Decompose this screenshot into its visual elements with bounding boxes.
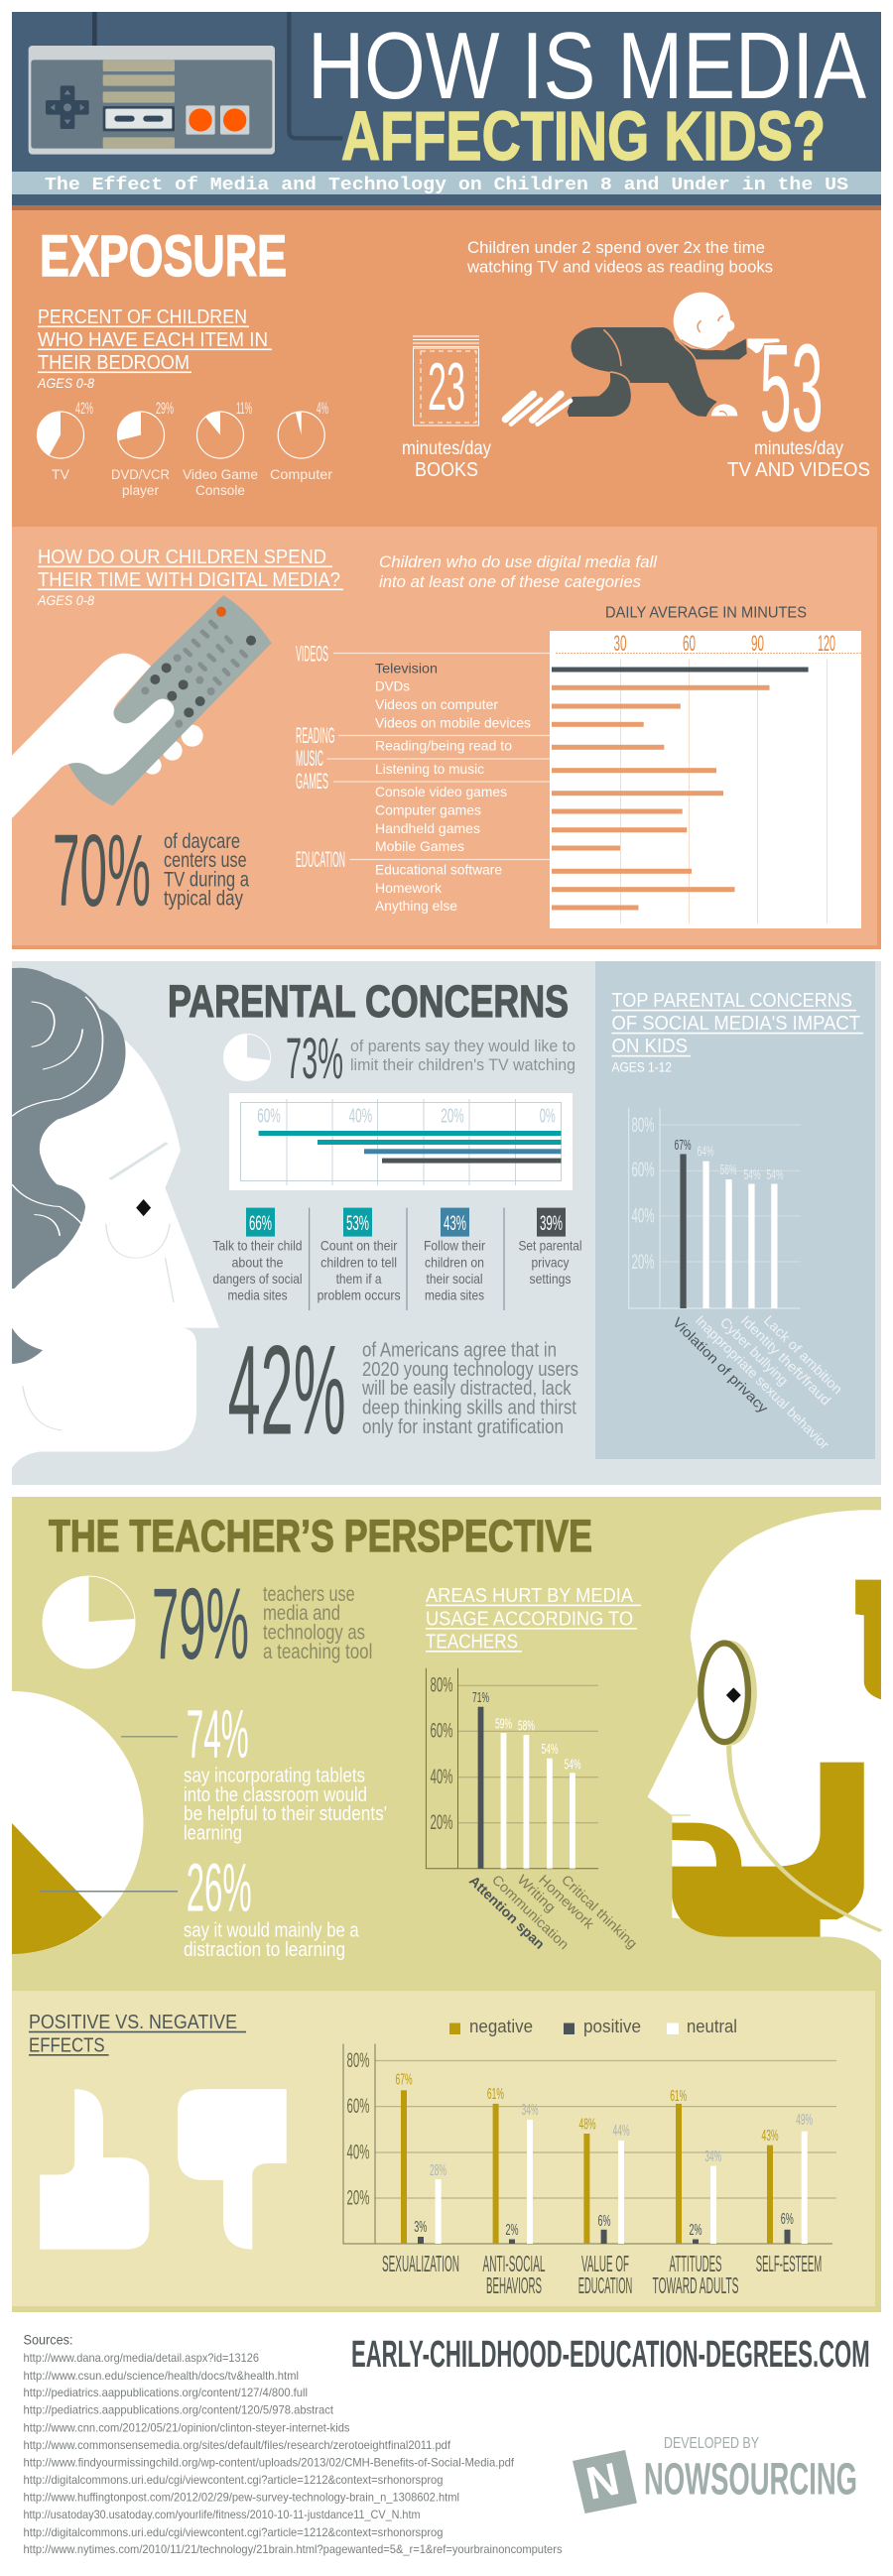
stat: 70 percent daycare: 70% [53,813,151,927]
icon: hand holding remote [12,595,272,818]
chart: top concerns bars [629,1108,845,1452]
chart: top concerns bars: 56% [720,1162,736,1178]
chart: effects bars: 60% [347,2095,369,2118]
heading: percent of children: AGES 0-8 [37,375,94,391]
heading: digital media time: THEIR TIME WITH DIGITAL MEDIA? [38,569,340,591]
legend: positive [583,2017,641,2036]
chart: top concerns bars: Violation of privacy [670,1314,771,1415]
stat: 53 percent count on [318,1208,401,1303]
stat: 79 percent: teachers use [263,1583,355,1606]
stat: 66 percent talk: dangers of social [212,1271,302,1287]
heading: digital media time [37,547,343,608]
chart: effects bars: 20% [347,2187,369,2210]
chart: effects bars: 3% [414,2219,427,2236]
heading: top parental concerns: OF SOCIAL MEDIA'S IMPACT [611,1013,860,1035]
pie: DVD/VCR player: DVD/VCR [111,466,170,482]
stat: 79 percent [43,1567,372,1680]
heading: digital media time: AGES 0-8 [37,592,94,608]
heading: positive vs negative: POSITIVE VS. NEGATIVE [29,2012,237,2033]
pie: video game console [183,399,258,498]
stat: 39 percent privacy: settings [530,1271,572,1287]
text block: sources: http://www.nytimes.com/2010/11/21/technology/21brain.html?pagewanted=5&_r=1&ref=yourbrainoncomputers [24,2542,562,2556]
panel: parental concerns [12,961,881,1485]
text: developed by: DEVELOPED BY [664,2435,759,2452]
text block: sources: http://www.commonsensemedia.org/sites/default/files/research/zerotoeightfinal2011.pdf [24,2438,451,2452]
heading: positive vs negative [29,2012,246,2057]
chart: parent actions bars: 60% [257,1105,281,1127]
legend: neutral [687,2017,737,2036]
chart: effects bars: 48% [579,2116,595,2133]
chart: areas hurt bars: 58% [518,1717,535,1734]
chart: activity labels: Reading/being read to [375,738,512,754]
text: categories note: Children who do use digital media fall [379,552,658,571]
text: books minutes: BOOKS [415,459,478,481]
logo: nowsourcing: N [581,2452,623,2510]
stat: 66 percent talk: 66% [249,1212,272,1235]
chart: effects bars: 6% [597,2213,611,2230]
chart: effects bars: ANTI-SOCIAL [482,2251,546,2276]
subtitle band [12,172,881,195]
text: categories note: into at least one of these categories [379,572,641,591]
chart: top concerns bars: 64% [697,1144,714,1161]
text: tv minutes [727,438,870,481]
chart: effects bars: ATTITUDES [669,2251,722,2276]
chart: effects bars: VALUE OF [581,2251,629,2276]
text block: sources: http://pediatrics.aappublications.org/content/127/4/800.full [24,2386,308,2399]
stat: 74 percent: learning [184,1823,242,1845]
text block: sources: http://www.cnn.com/2012/05/21/opinion/clinton-steyer-internet-kids [24,2420,349,2434]
chart: areas hurt bars: 40% [431,1766,452,1788]
chart: activity labels: Homework [375,880,443,896]
icon: book with 23: 23 [428,349,465,425]
text block: sources: http://pediatrics.aappublications.org/content/120/5/978.abstract [24,2403,334,2417]
text block: sources: http://www.dana.org/media/detail.aspx?id=13126 [24,2351,259,2365]
text block: sources: http://www.findyourmissingchild.org/wp-content/uploads/2013/02/CMH-Benefits-of-Social-Media.pdf [24,2456,515,2470]
chart: effects bars: 34% [522,2102,538,2119]
text: categories note [379,552,658,591]
chart: category labels: GAMES [296,769,328,794]
stat: 43 percent follow: media sites [425,1288,484,1303]
chart: top concerns bars: 80% [631,1114,655,1137]
chart: effects bars: 6% [781,2211,794,2228]
legend: negative [469,2017,533,2036]
text block: sources: http://digitalcommons.uri.edu/cgi/viewcontent.cgi?article=1212&context=srhonorsprog [24,2473,443,2487]
pie: video game console: Console [195,482,245,498]
stat: 43 percent follow: Follow their [424,1238,485,1254]
text block: sources: Sources: [24,2332,73,2348]
text: books minutes [402,438,491,481]
chart: bedroom item pies [38,399,332,498]
chart: top concerns bars: Identity theft/fraud [738,1312,834,1409]
stat: 42 percent: deep thinking skills and thirst [362,1398,576,1419]
chart: activity labels: Mobile Games [375,838,464,854]
chart: top concerns bars: 40% [631,1205,655,1228]
chart: top concerns bars: Cyber bullying [717,1314,792,1389]
stat: 73 percent: limit their children's TV watching [350,1055,575,1074]
chart: areas hurt bars: Attention span [466,1873,548,1952]
heading: top parental concerns [611,990,863,1075]
text block: sources: http://digitalcommons.uri.edu/cgi/viewcontent.cgi?article=1212&context=srhonorsprog [24,2525,443,2539]
chart: effects bars: 61% [487,2086,504,2103]
icon: book with 23 [413,336,479,426]
chart: parent actions bars: 40% [349,1105,372,1127]
chart: areas hurt bars: 80% [431,1674,452,1697]
stat: 39 percent privacy: privacy [532,1254,570,1270]
pie: computer: Computer [270,466,332,482]
chart: areas hurt bars: 20% [431,1811,452,1834]
chart: activity labels: Handheld games [375,820,480,836]
chart: areas hurt bars: Critical thinking [559,1872,641,1951]
icon: tablet pie semicircle [12,1691,178,1954]
heading: exposure: EXPOSURE [40,224,287,289]
chart: activity labels: Computer games [375,802,481,818]
chart: top concerns bars: 60% [631,1159,655,1181]
panel: digital media [12,526,881,949]
stat: 74 percent: be helpful to their students' [184,1803,387,1825]
text: under 2 comparison [466,238,773,276]
chart: activity labels: Videos on computer [375,696,498,712]
chart: areas hurt bars: 54% [564,1756,581,1773]
panel: positive vs negative effects [12,1991,875,2306]
panel: exposure [12,210,881,526]
legend [449,2017,737,2036]
pie: TV: 42% [75,399,93,418]
chart: areas hurt bars: Homework [536,1872,598,1932]
heading: parental concerns: PARENTAL CONCERNS [168,976,569,1027]
chart: parent actions bars: 20% [441,1105,464,1127]
heading: percent of children [37,307,272,391]
chart: category labels: MUSIC [296,746,323,771]
chart: activity labels: Educational software [375,862,502,878]
chart: daily minutes bars: 30 [613,631,627,656]
chart: activity labels [375,660,531,914]
stat: 26 percent: say it would mainly be a [184,1920,359,1942]
chart: effects bars: 49% [796,2112,813,2129]
chart: areas hurt bars: 54% [542,1741,558,1758]
chart: effects bars: TOWARD ADULTS [653,2272,738,2298]
chart: effects bars: 2% [689,2222,702,2239]
heading: percent of children: PERCENT OF CHILDREN [38,307,247,328]
text block: sources: http://www.csun.edu/science/health/docs/tv&health.html [24,2369,299,2383]
stat: 74 percent [184,1696,387,1845]
stat: 42 percent: will be easily distracted, lack [361,1378,572,1400]
pie: TV: TV [52,466,70,482]
stat: 43 percent follow: their social [427,1271,482,1287]
text: under 2 comparison: watching TV and videos as reading books [466,258,773,276]
stat: 66 percent talk: media sites [228,1288,288,1303]
text block: sources: http://usatoday30.usatoday.com/yourlife/fitness/2010-10-11-justdance11_CV_N.htm [24,2508,421,2521]
pie: computer: 4% [317,399,328,418]
chart: daily minutes bars: 120 [818,631,835,656]
logo: nowsourcing [573,2450,857,2514]
chart: activity labels: Listening to music [375,761,484,777]
chart: activity labels: Television [375,660,438,675]
chart: activity labels: Console video games [375,784,507,799]
stat: 70 percent daycare: typical day [164,888,243,911]
panel: header [12,12,881,210]
text block: sources [24,2332,562,2556]
text: books minutes: minutes/day [402,438,491,459]
stat: 42 percent: 2020 young technology users [362,1359,578,1381]
chart: effects bars: 28% [430,2162,446,2179]
text block: sources: http://www.huffingtonpost.com/2012/02/29/pew-survey-technology-brain_n_1308602.html [24,2490,459,2504]
heading: top parental concerns: AGES 1-12 [611,1059,672,1075]
stat: 42 percent: of Americans agree that in [362,1339,557,1361]
stat: 39 percent privacy: Set parental [518,1238,581,1254]
stat: 26 percent: 26% [187,1850,252,1926]
stat: 42 percent: only for instant gratification [362,1416,564,1438]
heading: percent of children: WHO HAVE EACH ITEM IN [38,329,268,351]
chart: effects bars: 43% [762,2128,778,2145]
heading: areas hurt [426,1585,641,1653]
chart: areas hurt bars: 71% [472,1689,489,1706]
stat: 42 percent: 42% [228,1319,346,1462]
chart: category labels: READING [296,723,335,748]
chart: effects bars: EDUCATION [578,2272,632,2298]
stat: 53 percent count on: children to tell [320,1254,397,1270]
stat: 79 percent: a teaching tool [263,1641,372,1663]
stat: 73 percent [223,1027,575,1091]
chart: parent actions bars: 0% [540,1105,556,1127]
pie: DVD/VCR player: player [122,482,159,498]
icon: thumbs up and down [40,2089,287,2250]
pie: TV [38,399,93,482]
chart: top concerns bars: Inappropriate sexual behavior [693,1312,833,1452]
heading: digital media time: HOW DO OUR CHILDREN SPEND [38,547,326,568]
icon: parent face profile [12,968,219,1468]
chart: activity labels: Videos on mobile devices [375,715,531,731]
chart: category labels: EDUCATION [296,847,345,872]
stat: 26 percent: distraction to learning [184,1939,345,1961]
stat: 66 percent talk: about the [232,1254,284,1270]
pie: video game console: 11% [236,399,252,418]
chart: effects bars: SEXUALIZATION [382,2251,459,2276]
stat: 70 percent daycare: of daycare [164,830,240,853]
chart: effects bars: 80% [347,2049,369,2072]
stat: 74 percent: into the classroom would [184,1784,367,1806]
chart: areas hurt bars: 59% [495,1715,512,1732]
icon: crawling baby [505,293,824,457]
chart: areas hurt bars [426,1668,641,1952]
chart: top concerns bars: 20% [631,1251,655,1274]
stat: 79 percent: 79% [152,1567,249,1680]
chart: daily minutes bars: 90 [751,631,764,656]
chart: areas hurt bars: Communication [489,1872,573,1952]
stat: 53 percent count on: 53% [346,1212,369,1235]
chart: daily minutes bars [550,631,864,928]
chart: effects bars [343,2043,836,2298]
pie: computer [270,399,332,482]
subtitle band: The Effect of Media and Technology on Children 8 and Under in the US [45,176,848,195]
stats: parent actions [212,1208,581,1310]
icon: game controller [29,12,342,155]
chart: effects bars: 67% [395,2071,413,2089]
stat: 26 percent [184,1850,359,1961]
heading: top parental concerns: TOP PARENTAL CONCERNS [611,990,852,1012]
pie: DVD/VCR player: 29% [156,399,174,418]
chart: effects bars: BEHAVIORS [486,2272,542,2298]
icon: teacher profile with monocle [648,1510,881,1961]
stat: 74 percent: say incorporating tablets [184,1766,365,1787]
chart: effects bars: 40% [347,2142,369,2164]
stat: 66 percent talk: Talk to their child [212,1238,302,1254]
stat: 79 percent: media and [263,1602,340,1625]
stat: 53 percent count on: problem occurs [318,1288,401,1303]
stat: 73 percent: of parents say they would like to [350,1037,575,1055]
stat: 73 percent: 73% [286,1027,343,1091]
chart: effects bars: 61% [670,2088,687,2105]
stat: 53 percent count on: Count on their [320,1238,398,1254]
stat: 39 percent privacy [518,1208,581,1287]
stat: 70 percent daycare: TV during a [164,869,249,892]
stat: 74 percent: 74% [187,1696,249,1773]
pie: video game console: Video Game [183,466,258,482]
chart: effects bars: 2% [506,2222,518,2239]
chart: effects bars: 34% [704,2148,721,2165]
stat: 66 percent talk [212,1208,302,1303]
heading: positive vs negative: EFFECTS [29,2035,105,2057]
chart: top concerns bars: 54% [744,1166,760,1183]
stat: 43 percent follow: children on [425,1254,484,1270]
pie: DVD/VCR player [111,399,174,498]
chart: effects bars: 44% [613,2123,629,2140]
stat: 43 percent follow: 43% [444,1212,466,1235]
heading: areas hurt: TEACHERS [426,1631,518,1653]
text: tv minutes: TV AND VIDEOS [727,459,870,481]
stat: 43 percent follow [424,1208,485,1303]
panel: teacher's perspective [12,1497,881,2312]
chart: category labels [296,642,550,872]
chart: areas hurt bars: 60% [431,1720,452,1743]
heading: areas hurt: USAGE ACCORDING TO [426,1608,633,1630]
chart: areas hurt bars: Writing [514,1872,559,1915]
heading: teacher's perspective: THE TEACHER’S PERSPECTIVE [49,1511,592,1561]
stat: 39 percent privacy: 39% [540,1212,563,1235]
heading: top parental concerns: ON KIDS [611,1036,688,1057]
heading: areas hurt: AREAS HURT BY MEDIA [426,1585,634,1607]
chart: top concerns bars: 67% [675,1137,691,1154]
stat: 79 percent: technology as [263,1622,365,1645]
chart: top concerns bars: 54% [766,1166,784,1183]
chart: parent actions bars [229,1093,573,1190]
chart: activity labels: Anything else [375,898,457,914]
chart: activity labels: DVDs [375,678,410,694]
text: tv minutes: minutes/day [754,438,843,459]
heading: daily average: DAILY AVERAGE IN MINUTES [605,605,807,622]
chart: daily minutes bars: 60 [683,631,696,656]
chart: top concerns bars: Lack of ambition [761,1312,845,1397]
heading: percent of children: THEIR BEDROOM [38,352,190,374]
text: under 2 comparison: Children under 2 spend over 2x the time [467,238,765,257]
stat: 70 percent daycare: centers use [164,849,247,872]
stat: 53 percent count on: them if a [336,1271,382,1287]
chart: category labels: VIDEOS [296,642,328,667]
